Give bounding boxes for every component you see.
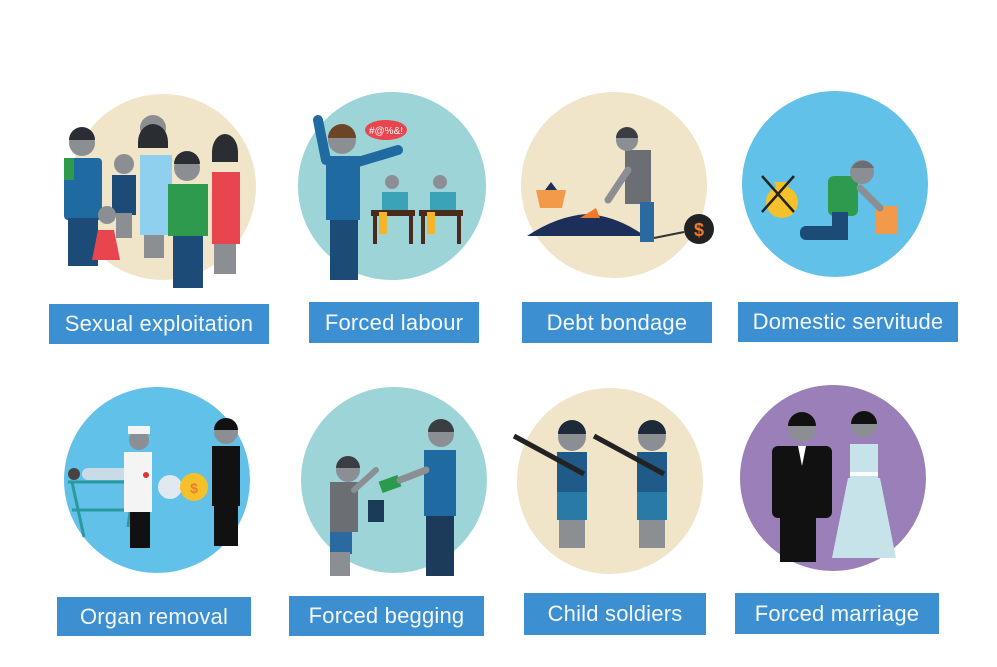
buyer in black <box>212 418 240 546</box>
label: Forced marriage: Forced marriage <box>755 600 919 626</box>
panel: forced labour illustration <box>298 92 486 280</box>
label: Organ removal <box>57 597 251 636</box>
money bag: $ <box>190 480 198 496</box>
label: Forced begging <box>289 596 484 636</box>
soldiers with rifles <box>514 420 667 548</box>
worker with chain <box>608 127 714 244</box>
workers at sewing machines <box>371 175 463 244</box>
speech bubble <box>365 120 407 140</box>
panel: domestic servitude illustration <box>742 91 928 277</box>
crossed money bag <box>762 176 798 218</box>
label: Forced labour <box>309 302 479 343</box>
label: Domestic servitude <box>738 302 958 342</box>
speech bubble: #@%&! <box>369 126 403 137</box>
label: Sexual exploitation: Sexual exploitation <box>65 311 253 336</box>
worker with chain: $ <box>694 220 704 240</box>
piles and cart <box>527 182 645 236</box>
label: Forced labour: Forced labour <box>325 310 463 334</box>
label: Forced begging: Forced begging <box>309 603 464 628</box>
label: Debt bondage <box>522 302 712 343</box>
money bag <box>180 473 208 501</box>
panel: debt bondage illustration <box>521 92 714 278</box>
label: Organ removal: Organ removal <box>80 604 228 628</box>
panel: sexual exploitation illustration <box>64 94 256 288</box>
panel: forced marriage illustration <box>740 385 926 571</box>
label: Debt bondage: Debt bondage <box>547 310 687 334</box>
bride <box>832 411 896 558</box>
adult <box>400 419 456 576</box>
label: Child soldiers <box>524 593 706 635</box>
label: Forced marriage <box>735 593 939 634</box>
kneeling worker with bucket <box>800 160 898 240</box>
groom <box>772 412 832 562</box>
surgeon <box>124 426 182 548</box>
figure: shouting boss <box>318 120 398 280</box>
label: Child soldiers: Child soldiers <box>548 601 682 626</box>
label: Sexual exploitation <box>49 304 269 344</box>
figures: family group <box>64 115 240 288</box>
child beggar <box>330 456 384 576</box>
panel: organ removal illustration <box>64 387 250 573</box>
label: Domestic servitude: Domestic servitude <box>753 309 943 334</box>
panel: forced begging illustration <box>301 387 487 576</box>
operating table with patient <box>68 468 138 537</box>
panel: child soldiers illustration <box>514 388 703 574</box>
banknote <box>379 475 401 493</box>
